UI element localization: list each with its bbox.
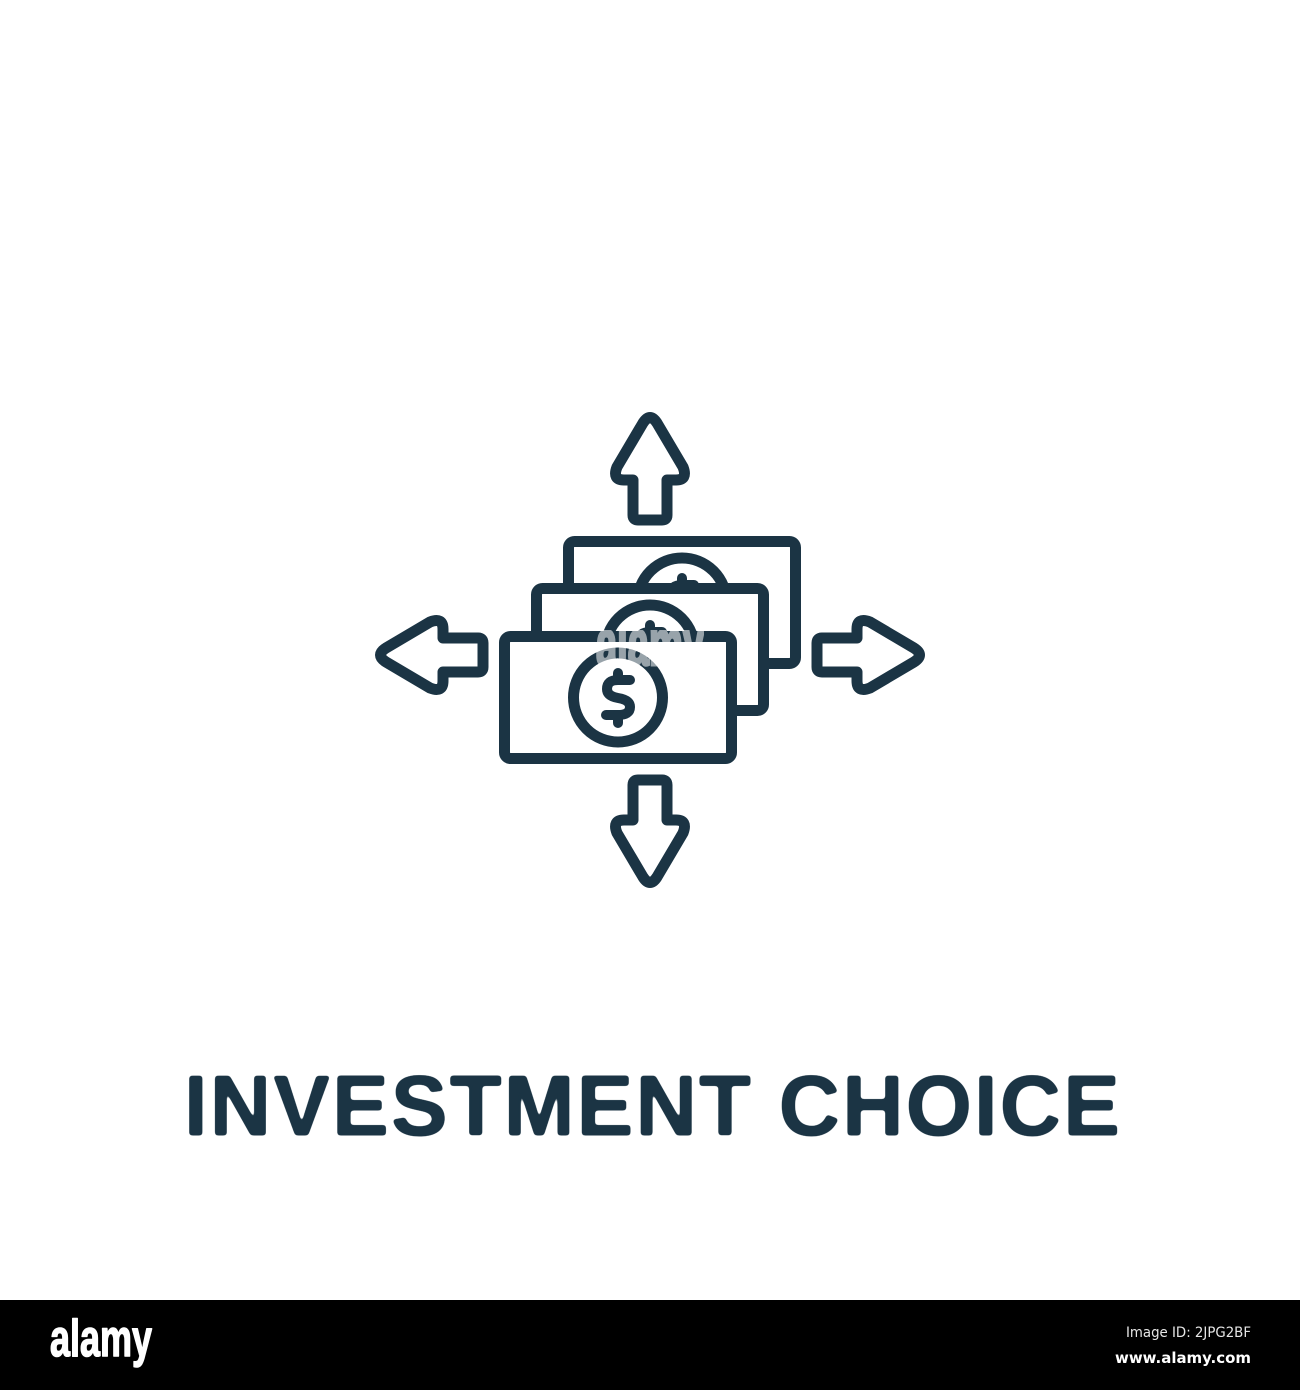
footer bar [0,1300,1300,1390]
banknote: back [568,542,796,664]
banknote: middle [536,588,764,710]
icon: investment choice [380,418,920,882]
banknote: front [504,636,732,758]
arrow: left [380,621,483,689]
watermark: alamy [596,607,704,679]
arrow: down [616,780,684,882]
footer logo: alamy [50,1310,152,1368]
arrow: up [616,418,684,520]
image id: Image ID: 2JPG2BF [1126,1325,1251,1341]
website: www.alamy.com [1115,1349,1251,1367]
arrow: right [817,621,920,689]
title: INVESTMENT CHOICE [184,1059,1120,1154]
